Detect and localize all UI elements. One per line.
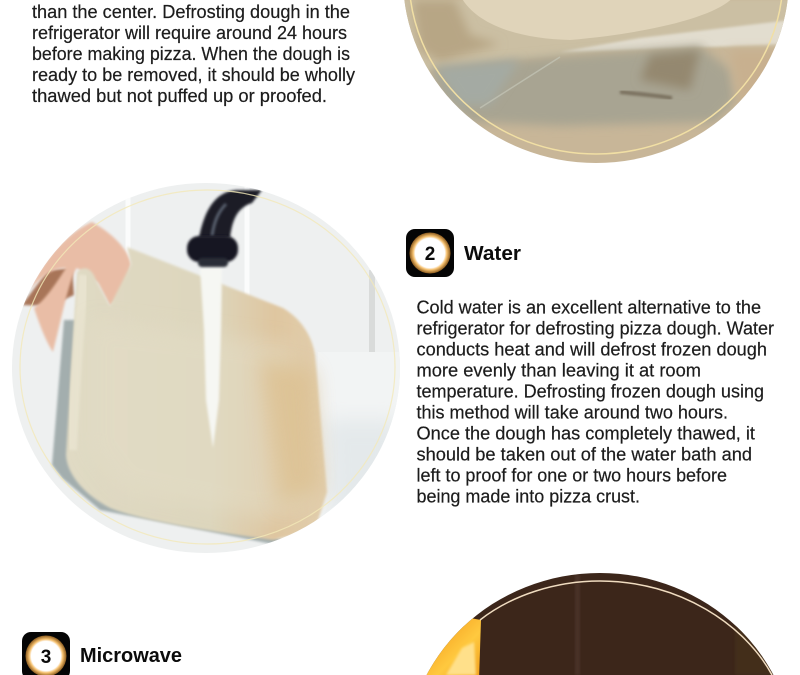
- lower counter surface: [430, 46, 735, 126]
- flame: [426, 618, 481, 675]
- badge: step 3: 3: [41, 647, 51, 668]
- tray left rim: [72, 275, 84, 450]
- panel: dough body text: thawed but not puffed up or proofed.: [32, 86, 327, 106]
- badge: step 3: [22, 632, 70, 675]
- panel: water body text: [416, 298, 774, 506]
- panel: microwave photo: [426, 573, 774, 675]
- panel: water body text: this method will take around two hours.: [416, 402, 728, 422]
- dark hand shadow: [22, 268, 74, 306]
- water stream: [200, 268, 222, 448]
- panel: water body text: conducts heat and will defrost frozen dough: [416, 340, 767, 360]
- gold ring: [409, 0, 783, 154]
- hand: [30, 222, 131, 352]
- badge: step 2: 2: [425, 244, 435, 265]
- tray grey edge: [52, 320, 285, 544]
- heading: Microwave: Microwave: [80, 645, 182, 667]
- tray: [66, 247, 327, 540]
- panel: water thawing photo: [0, 175, 410, 560]
- wall tiles: [126, 187, 250, 294]
- panel: dough body text: ready to be removed, it should be wholly: [32, 65, 355, 85]
- panel: dough body text: refrigerator will require around 24 hours: [32, 23, 347, 43]
- panel: water body text: Cold water is an excellent alternative to the: [416, 298, 761, 318]
- panel: refrigerator thawing photo: [400, 0, 800, 170]
- panel: water body text: left to proof for one or two hours before: [416, 466, 727, 486]
- panel: dough body text: before making pizza. When the dough is: [32, 44, 350, 64]
- faucet: [199, 190, 262, 238]
- gold ring: [20, 190, 395, 544]
- panel: water body text: should be taken out of the water bath and: [416, 444, 752, 464]
- panel: water body text: more evenly than leaving it at room: [416, 360, 701, 380]
- panel: dough body text: [32, 2, 355, 106]
- gold ring: [480, 581, 772, 675]
- badge: step 2: [406, 229, 454, 277]
- dough top: [460, 0, 735, 40]
- panel: dough body text: than the center. Defrosting dough in the: [32, 2, 350, 22]
- heading: Water: Water: [464, 243, 521, 265]
- tray rack band: [400, 0, 800, 72]
- panel: water body text: refrigerator for defrosting pizza dough. Water: [416, 318, 774, 338]
- panel: water body text: temperature. Defrosting frozen dough using: [416, 382, 764, 402]
- panel: water body text: being made into pizza crust.: [416, 486, 640, 506]
- panel: water body text: Once the dough has completely thawed, it: [416, 424, 755, 444]
